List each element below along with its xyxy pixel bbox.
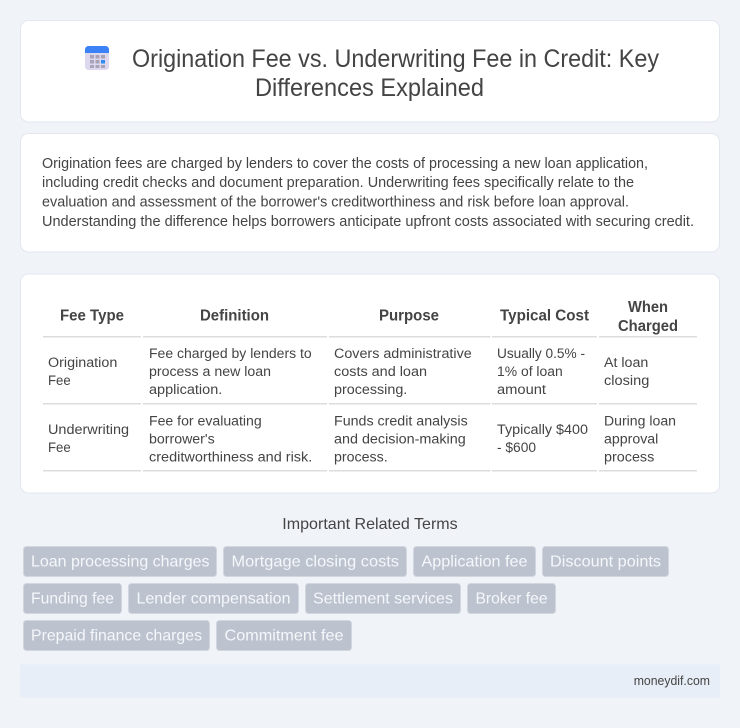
tag: application fee: Application fee [422,554,528,571]
table row: underwriting fee: process [604,449,654,465]
tag: loan processing charges [24,546,216,576]
title: Differences Explained [255,74,484,102]
heading: important related terms: Important Related Terms [282,516,458,533]
table row: origination fee: Fee [48,373,71,389]
table row: underwriting fee: borrower's [149,431,215,447]
table row: underwriting fee: Underwriting [48,422,129,438]
tag: broker fee: Broker fee [476,591,548,608]
table row: origination fee: 1% of loan [497,364,563,380]
table row: underwriting fee: Funds credit analysis [334,413,468,429]
tag: discount points: Discount points [550,554,661,571]
tag list: related terms [24,546,668,650]
table row: underwriting fee [48,413,676,465]
tag: mortgage closing costs [224,546,406,576]
tag: application fee [414,546,536,576]
table row: underwriting fee: - $600 [497,440,536,456]
tag: funding fee [24,584,122,614]
table row: underwriting fee: During loan [604,413,676,429]
tag: lender compensation [128,584,298,614]
tag: prepaid finance charges [24,620,210,650]
text block: introduction paragraph: Understanding the difference helps borrowers anticipate upfront costs associated with securing credit. [42,214,694,230]
footer source text: moneydif.com [634,673,710,688]
table row: origination fee: Origination [48,355,117,371]
table row: origination fee: closing [604,373,649,389]
tag: broker fee [468,584,556,614]
table header row: Charged [618,318,678,335]
tag: prepaid finance charges: Prepaid finance charges [31,628,202,645]
table row: origination fee: application. [149,382,222,398]
table row: origination fee: amount [497,382,546,398]
text block: introduction paragraph: including credit checks and document preparation. Underwriting fees specifically relate to the [42,175,634,191]
table header row: Typical Cost [500,308,590,325]
tag: discount points [542,546,668,576]
panel: title card [20,20,720,122]
panel: comparison table [20,274,720,493]
table row: underwriting fee: approval [604,431,658,447]
table row: underwriting fee: creditworthiness and risk. [149,449,312,465]
table row: underwriting fee: Fee for evaluating [149,413,262,429]
table row: underwriting fee: Fee [48,440,71,456]
table header row: Definition [200,308,269,325]
table header row: Fee Type [60,308,124,325]
table row: underwriting fee: process. [334,449,388,465]
tag: settlement services: Settlement services [313,591,453,608]
table row: origination fee: process a new loan [149,364,271,380]
table row: origination fee: Usually 0.5% - [497,346,585,362]
table row: origination fee: Covers administrative [334,346,472,362]
title [132,45,659,102]
tag: commitment fee: Commitment fee [224,628,344,645]
tag: funding fee: Funding fee [31,591,114,608]
table row: origination fee: At loan [604,355,648,371]
icon: calendar [85,46,109,70]
table row: origination fee: processing. [334,382,407,398]
panel: introduction [20,134,720,252]
table row: underwriting fee: and decision-making [334,431,466,447]
table row: origination fee: Fee charged by lenders to [149,346,312,362]
text block: introduction paragraph [42,156,694,230]
table row: origination fee: costs and loan [334,364,427,380]
table header row: Purpose [379,308,439,325]
footer bar [20,664,720,698]
table header row: When [628,299,668,316]
tag: lender compensation: Lender compensation [136,591,290,608]
text block: introduction paragraph: evaluation and assessment of the borrower's creditworthiness and risk before loan approval. [42,194,629,210]
tag: settlement services [306,584,460,614]
tag: mortgage closing costs: Mortgage closing costs [232,554,399,571]
tag: commitment fee [216,620,352,650]
table row: underwriting fee: Typically $400 [497,422,588,438]
tag: loan processing charges: Loan processing charges [31,554,210,571]
table header row [60,299,678,335]
table row: origination fee [48,346,649,398]
text block: introduction paragraph: Origination fees are charged by lenders to cover the costs of processing a new loan application, [42,156,648,172]
title: Origination Fee vs. Underwriting Fee in Credit: Key [132,45,659,73]
